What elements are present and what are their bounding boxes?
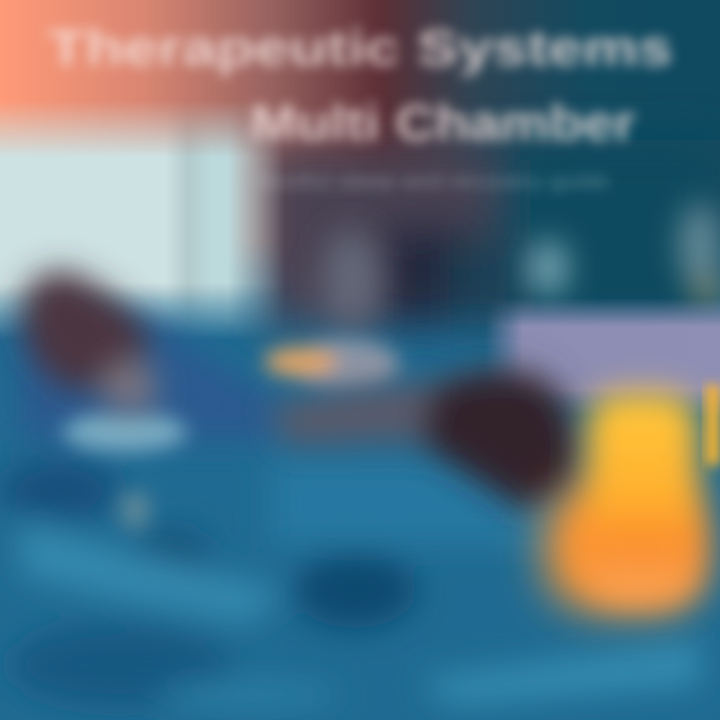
orange lamp glow bbox=[545, 385, 720, 610]
lamp and shelf objects bbox=[322, 203, 720, 330]
title: Therapeutic Systems bbox=[48, 20, 672, 76]
subtitle: Restful sleep and recovery guide bbox=[254, 171, 610, 193]
sleeping person: head and hair bbox=[23, 271, 158, 414]
window: bright curtains bbox=[0, 100, 285, 340]
title bbox=[48, 20, 672, 151]
second sleeper: dark hair bbox=[270, 366, 582, 512]
pillow and warm reflection bbox=[63, 339, 400, 530]
lilac bedside table bbox=[485, 298, 720, 418]
title: Multi Chamber bbox=[250, 95, 636, 151]
dark centre wall bbox=[262, 140, 720, 330]
upper wall gradient bbox=[0, 0, 720, 300]
blue blanket bbox=[0, 320, 700, 709]
